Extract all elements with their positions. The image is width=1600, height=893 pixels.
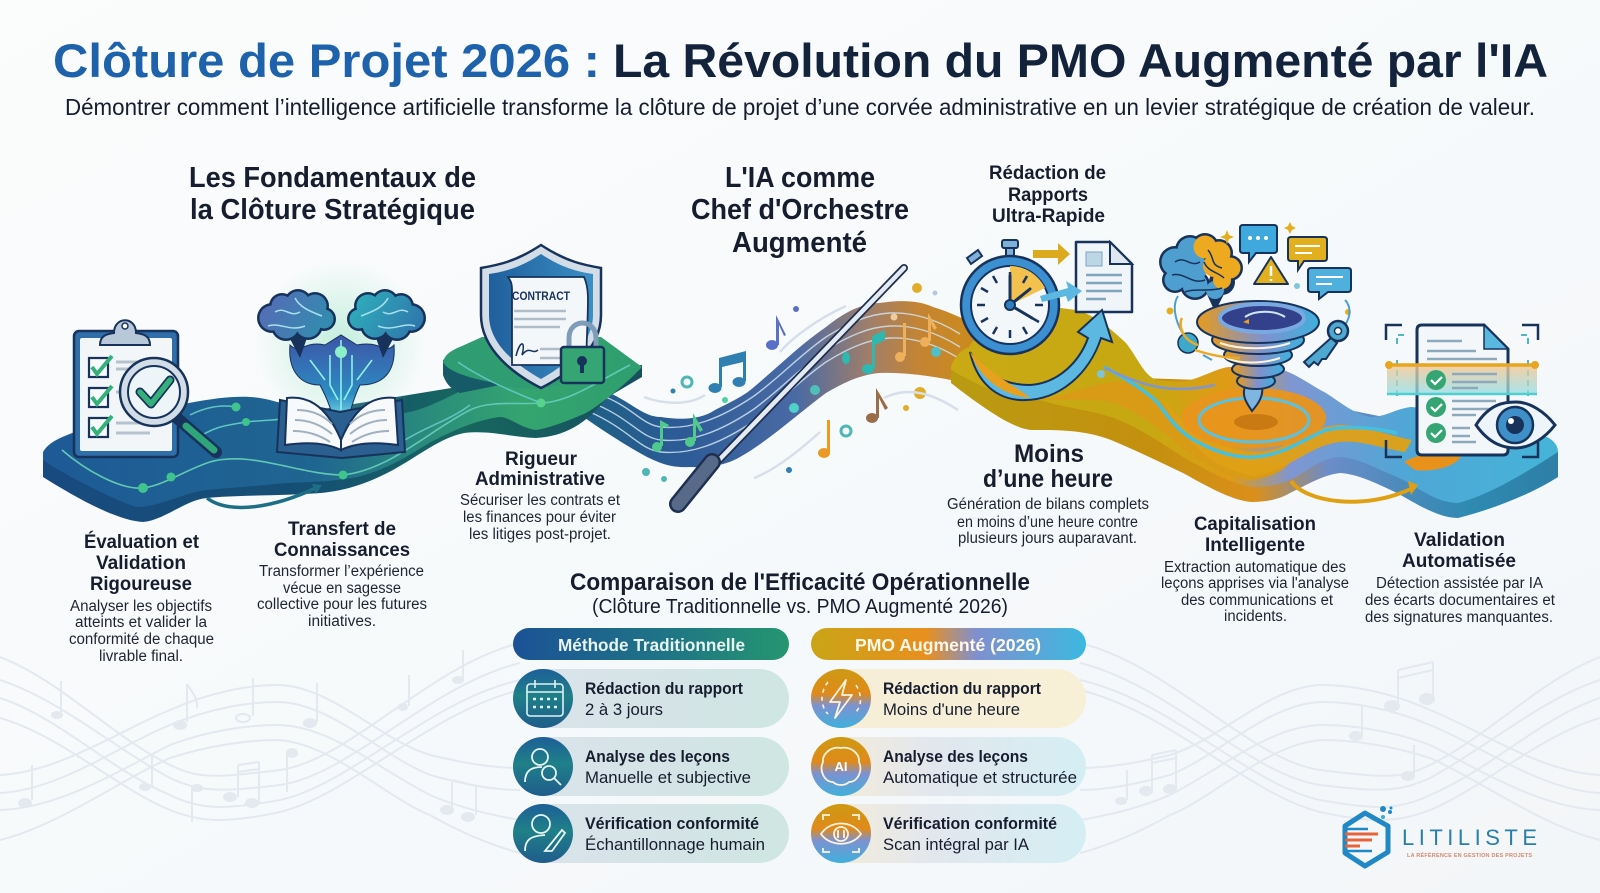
heading: ultra-fast reports: Ultra-Rapide (992, 205, 1105, 227)
step: smart capitalization: Intelligente (1205, 534, 1305, 556)
step: under one hour (947, 440, 1149, 547)
step: under one hour: plusieurs jours auparavant. (958, 530, 1137, 547)
step: administrative rigor (460, 448, 621, 543)
icon: scanned document and eye (1385, 325, 1555, 457)
step: evaluation: livrable final. (99, 648, 183, 665)
heading: AI conductor: Augmenté (732, 227, 867, 259)
heading: ultra-fast reports: Rédaction de (989, 162, 1106, 184)
step: evaluation: Évaluation et (84, 530, 199, 553)
title (53, 34, 1548, 87)
row: lessons analysis, augmented: Automatique et structurée (883, 768, 1077, 787)
row: compliance check, traditional: Échantillonnage humain (585, 835, 765, 854)
heading: ultra-fast reports (989, 162, 1106, 227)
step: automated validation: Détection assistée par IA (1376, 575, 1544, 592)
title: Clôture de Projet 2026 : (53, 34, 600, 87)
step: smart capitalization (1161, 513, 1349, 625)
step: under one hour: Moins (1014, 440, 1084, 468)
row: report writing, augmented: Moins d'une heure (883, 700, 1020, 719)
step: automated validation (1365, 529, 1556, 626)
comparison heading: Comparaison de l'Efficacité Opérationnelle (570, 569, 1030, 596)
logo: Litiliste: LA RÉFÉRENCE EN GESTION DES PROJETS (1407, 851, 1532, 859)
step: smart capitalization: des communications et (1181, 592, 1334, 609)
step: automated validation: des signatures manquantes. (1365, 609, 1553, 626)
row: report writing, augmented (811, 669, 1086, 728)
row: compliance check, augmented: Vérification conformité (883, 814, 1057, 833)
heading: fundamentals: la Clôture Stratégique (190, 194, 475, 226)
step: administrative rigor: Sécuriser les contrats et (460, 492, 621, 509)
step: evaluation: Rigoureuse (90, 573, 192, 595)
background: faint musical staves (0, 643, 1600, 853)
logo: Litiliste: LITILISTE (1402, 825, 1537, 850)
row: lessons analysis, traditional (513, 737, 789, 796)
step: evaluation: Analyser les objectifs (70, 598, 212, 615)
row: lessons analysis, augmented (811, 737, 1086, 796)
step: knowledge transfer: Connaissances (274, 539, 410, 561)
brain (1159, 233, 1243, 312)
ribbon: musical staff middle (585, 301, 990, 467)
column header: augmented: PMO Augmenté (2026) (855, 635, 1041, 655)
step: smart capitalization: leçons apprises via l'analyse (1161, 575, 1349, 592)
row: lessons analysis, augmented: AI (834, 759, 848, 774)
row: report writing, traditional (513, 669, 789, 728)
subtitle: Démontrer comment l’intelligence artificielle transforme la clôture de projet d’une corvée administrative en un levier stratégique de création de valeur. (65, 94, 1535, 120)
step: under one hour: en moins d’une heure contre (957, 514, 1138, 531)
row: compliance check, traditional (513, 804, 789, 863)
step: administrative rigor: les litiges post-projet. (469, 526, 611, 543)
row: lessons analysis, traditional: Manuelle et subjective (585, 768, 751, 787)
heading: fundamentals: Les Fondamentaux de (189, 162, 476, 194)
row: lessons analysis, traditional: Analyse des leçons (585, 747, 730, 766)
comparison column: augmented PMO (811, 628, 1086, 863)
step: evaluation: atteints et valider la (75, 614, 207, 631)
step: administrative rigor: Administrative (475, 468, 605, 490)
column header: augmented (811, 628, 1086, 660)
row: report writing, traditional: Rédaction du rapport (585, 679, 743, 698)
icon: clipboard with magnifier (74, 320, 216, 457)
icon: contract shield and padlock (481, 245, 604, 388)
icon: brains rising from a book (256, 260, 426, 458)
comparison column: traditional method (513, 628, 789, 863)
comparison heading: (Clôture Traditionnelle vs. PMO Augmenté 2026) (592, 596, 1008, 618)
comparison heading (570, 569, 1030, 618)
row: compliance check, augmented: Scan intégral par IA (883, 835, 1030, 854)
step: administrative rigor: Rigueur (505, 448, 577, 470)
row: lessons analysis, augmented: Analyse des leçons (883, 747, 1028, 766)
step: under one hour: d’une heure (983, 465, 1113, 493)
step: automated validation: des écarts documentaires et (1365, 592, 1556, 609)
heading: AI conductor: L'IA comme (725, 162, 875, 194)
step: smart capitalization: Capitalisation (1194, 513, 1316, 535)
heading: AI conductor: Chef d'Orchestre (691, 194, 909, 226)
heading: AI conductor (691, 162, 909, 259)
icon: conductor baton (678, 268, 904, 504)
step: smart capitalization: incidents. (1224, 608, 1287, 625)
column header: traditional: Méthode Traditionnelle (558, 635, 745, 655)
step: evaluation: Validation (96, 552, 186, 574)
row: report writing, traditional: 2 à 3 jours (585, 700, 663, 719)
step: knowledge transfer: Transformer l’expérience (259, 563, 424, 580)
ribbon: gold to blue right platform (951, 300, 1558, 518)
row: report writing, augmented: Rédaction du rapport (883, 679, 1041, 698)
step: evaluation (69, 530, 214, 665)
ribbon: blue-green foundation platform (43, 337, 642, 522)
step: evaluation: conformité de chaque (69, 631, 214, 648)
step: knowledge transfer: Transfert de (288, 518, 396, 540)
step: knowledge transfer (257, 518, 427, 630)
column header: traditional (513, 628, 789, 660)
step: automated validation: Validation (1414, 529, 1505, 551)
icon: contract shield and padlock: CONTRACT (512, 291, 570, 303)
icon: stopwatch, report document and arrow (961, 240, 1132, 400)
step: knowledge transfer: initiatives. (308, 613, 376, 630)
step: automated validation: Automatisée (1402, 550, 1516, 572)
icon: tornado with brain, bubbles and key (1159, 222, 1351, 411)
step: knowledge transfer: vécue en sagesse (283, 580, 401, 597)
icon: musical notes floating around the staff (642, 283, 958, 482)
row: compliance check, augmented (811, 804, 1086, 863)
row: compliance check, traditional: Vérification conformité (585, 814, 759, 833)
step: knowledge transfer: collective pour les futures (257, 596, 427, 613)
step: smart capitalization: Extraction automatique des (1164, 559, 1346, 576)
heading: fundamentals (189, 162, 476, 226)
logo: Litiliste (1345, 806, 1537, 866)
heading: ultra-fast reports: Rapports (1008, 184, 1088, 206)
step: under one hour: Génération de bilans complets (947, 496, 1149, 513)
step: administrative rigor: les finances pour éviter (463, 509, 616, 526)
title: La Révolution du PMO Augmenté par l'IA (613, 34, 1548, 87)
